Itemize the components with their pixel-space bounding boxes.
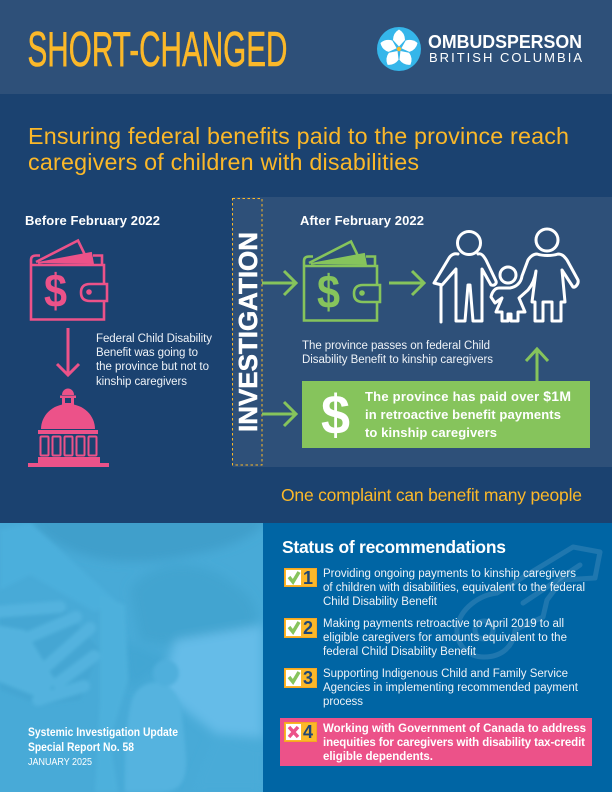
icon: pink wallet: $ — [44, 264, 67, 317]
callout: $1M paid: The province has paid over $1M — [365, 388, 571, 404]
subtitle — [28, 123, 569, 175]
logo: Ombudsperson British Columbia: OMBUDSPERSON — [428, 32, 582, 52]
icon: green wallet: $ — [317, 265, 340, 318]
recommendation 2 — [284, 618, 567, 658]
text: after description: Disability Benefit to kinship caregivers — [302, 354, 493, 366]
logo: Ombudsperson British Columbia — [377, 27, 582, 71]
icon: pink wallet — [31, 240, 107, 320]
panel: before February 2022 — [25, 213, 212, 467]
text: before description: Federal Child Disability — [96, 333, 212, 345]
recommendation 1: 1 — [303, 568, 313, 588]
icon: green wallet — [304, 242, 380, 320]
heading: status: Status of recommendations — [282, 537, 506, 557]
text: before description: the province but not to — [96, 361, 209, 373]
report details — [28, 725, 178, 768]
recommendation 4 highlight: inequities for caregivers with disability tax-credit — [323, 737, 585, 749]
recommendation 2: federal Child Disability Benefit — [323, 646, 477, 658]
arrow: wallet to family — [389, 271, 424, 295]
recommendation 4 highlight: eligible dependents. — [323, 751, 433, 763]
panel: after February 2022 — [232, 197, 612, 467]
text: before description — [96, 333, 212, 388]
text: before description: kinship caregivers — [96, 376, 187, 388]
callout: $1M paid — [302, 381, 590, 448]
recommendation 2: Making payments retroactive to April 2019 to all — [323, 618, 564, 630]
subtitle: Ensuring federal benefits paid to the province reach — [28, 123, 569, 149]
watermark key — [457, 547, 600, 657]
icon: legislature dome — [28, 389, 109, 467]
arrow: investigation to callout — [262, 402, 296, 426]
recommendation 1: Providing ongoing payments to kinship caregivers — [323, 568, 576, 580]
investigation dashed box: INVESTIGATION — [235, 232, 263, 432]
recommendation 2: 2 — [303, 618, 313, 638]
logo: Ombudsperson British Columbia: BRITISH COLUMBIA — [429, 50, 582, 65]
icon: family — [434, 229, 578, 322]
callout: $1M paid: $ — [321, 383, 350, 446]
text: after description: The province passes on federal Child — [302, 340, 490, 352]
tagline: One complaint can benefit many people — [281, 485, 582, 505]
title: SHORT-CHANGED — [28, 22, 288, 77]
heading: after: After February 2022 — [300, 213, 424, 228]
recommendation 3: Agencies in implementing recommended payment — [323, 682, 579, 694]
recommendation 3: process — [323, 696, 363, 708]
recommendation 1 — [284, 568, 585, 608]
report details: Systemic Investigation Update — [28, 725, 178, 739]
photo panel — [0, 515, 270, 792]
recommendation 4 highlight: 4 — [303, 722, 313, 742]
recommendation 3: 3 — [303, 668, 313, 688]
investigation dashed box — [232, 198, 263, 465]
text: before description: Benefit was going to — [96, 347, 198, 359]
callout: $1M paid: to kinship caregivers — [365, 425, 497, 440]
header band — [0, 0, 612, 94]
recommendation 2: eligible caregivers for amounts equivalent to the — [323, 632, 567, 644]
arrow: wallet to legislature — [57, 328, 79, 375]
heading: before: Before February 2022 — [25, 213, 160, 228]
recommendation 1: Child Disability Benefit — [323, 596, 438, 608]
recommendation 1: of children with disabilities, equivalent to the federal — [323, 582, 585, 594]
text: after description — [302, 340, 493, 366]
report details: JANUARY 2025 — [28, 756, 92, 768]
recommendation 4 highlight — [280, 718, 592, 766]
recommendation 4 highlight: Working with Government of Canada to address — [323, 723, 586, 735]
report details: Special Report No. 58 — [28, 740, 134, 754]
arrow: callout up to family — [526, 349, 548, 381]
arrow: investigation to wallet — [262, 271, 296, 295]
subtitle: caregivers of children with disabilities — [28, 149, 419, 175]
recommendation 3: Supporting Indigenous Child and Family Service — [323, 668, 568, 680]
recommendation 3 — [284, 668, 579, 708]
panel: status of recommendations — [263, 523, 612, 792]
callout: $1M paid: in retroactive benefit payments — [365, 407, 561, 422]
